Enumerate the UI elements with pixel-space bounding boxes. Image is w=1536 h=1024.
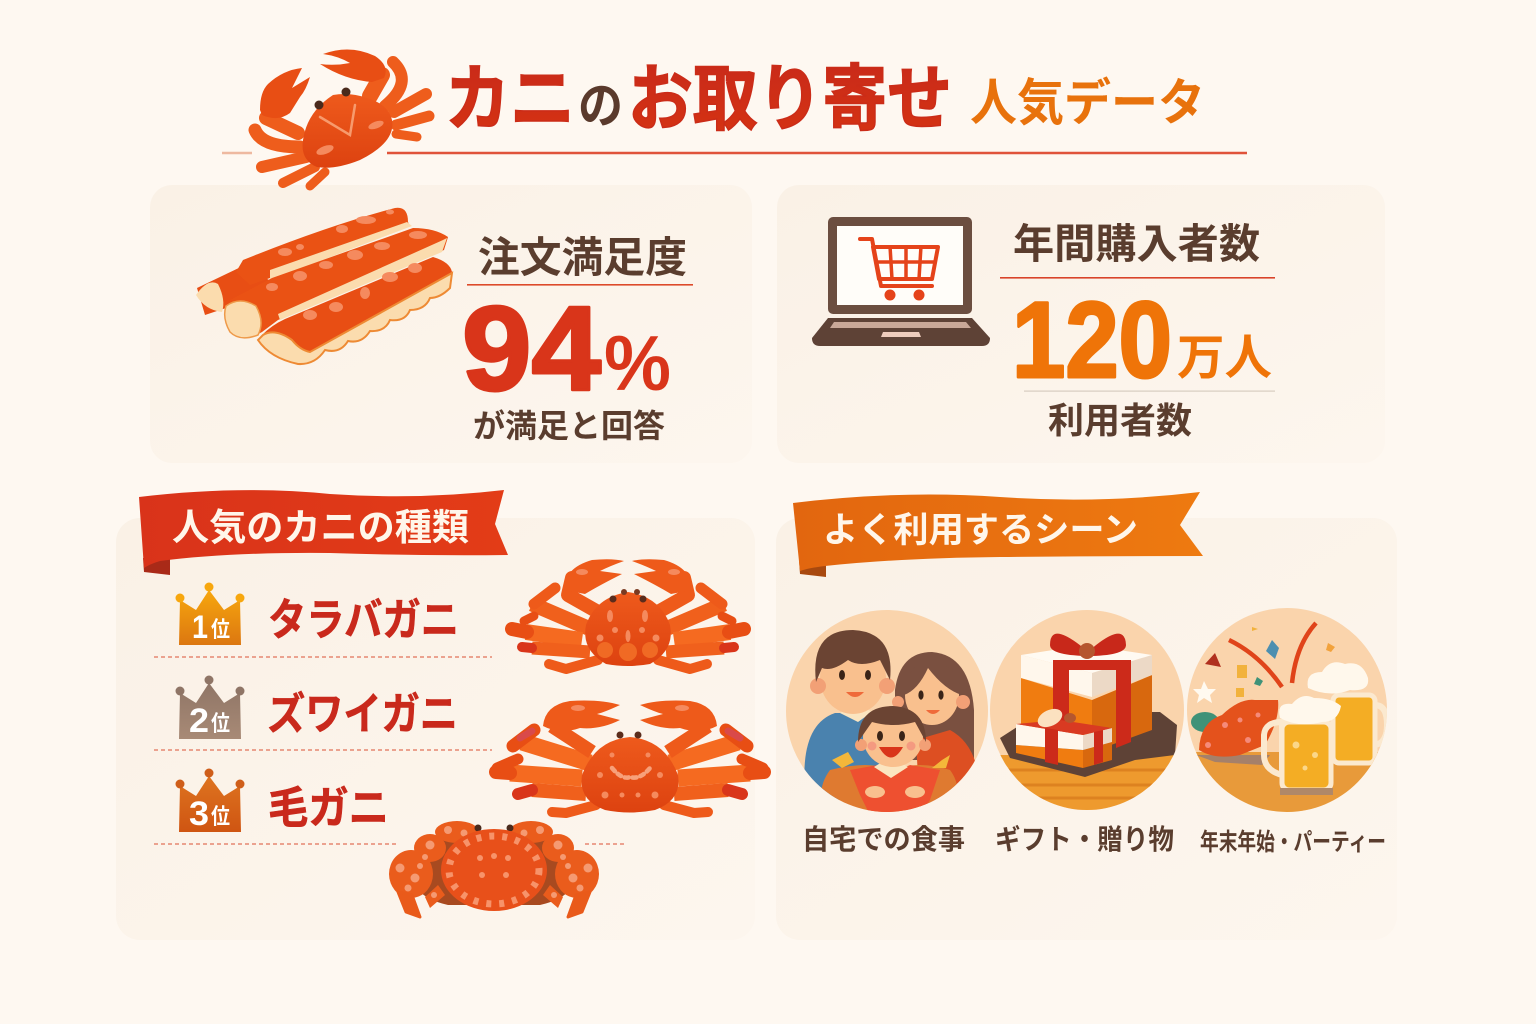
title: particle: の — [578, 78, 623, 134]
illustration: zuwaigani — [496, 700, 764, 813]
scene: party — [1180, 605, 1395, 856]
heading: 年間購入者数 — [1013, 221, 1260, 267]
rank 3 row — [176, 768, 389, 833]
stat: 94: 94 — [462, 282, 601, 416]
rank 2 row: 位 — [211, 711, 230, 736]
icon: header crab — [255, 49, 429, 186]
scene: family meal — [780, 605, 995, 855]
title: order: お取り寄せ — [628, 60, 952, 140]
heading rule — [467, 284, 693, 286]
rank 1 row: タラバガニ — [268, 596, 459, 645]
caption: が満足と回答 — [473, 408, 665, 444]
title: main: カニ — [445, 60, 575, 140]
panel: satisfaction — [150, 185, 752, 463]
banner: popular types: 人気のカニの種類 — [172, 507, 469, 548]
scene: gifts — [985, 605, 1190, 855]
panel: annual buyers — [777, 185, 1385, 463]
heading rule — [1000, 277, 1275, 279]
rank 1 row: 位 — [211, 617, 230, 642]
stat: unit: 万人 — [1177, 332, 1272, 385]
scene label: 年末年始・パーティー — [1200, 829, 1386, 856]
stat: 120: 120 — [1012, 279, 1172, 400]
illustration: crab legs — [196, 208, 452, 364]
rank 1 row — [176, 582, 459, 645]
heading: 注文満足度 — [478, 234, 687, 281]
title: subtitle: 人気データ — [970, 75, 1205, 131]
banner: popular types — [139, 490, 508, 575]
banner: usage scenes: よく利用するシーン — [823, 511, 1138, 550]
stat: percent: % — [604, 319, 671, 407]
illustration: tarabagani — [512, 559, 744, 669]
rank 2 row — [176, 676, 458, 740]
panel: usage scenes — [776, 492, 1387, 853]
panel: popular crab types — [116, 490, 764, 940]
rank 2 row: ズワイガニ — [267, 690, 458, 739]
icon: laptop with cart — [812, 217, 990, 346]
rank 2 row: 2 — [189, 702, 209, 740]
rank 3 row: 毛ガニ — [268, 784, 389, 833]
scene label: ギフト・贈り物 — [995, 824, 1174, 855]
illustration: kegani — [389, 821, 599, 917]
rank 3 row: 3 — [189, 795, 209, 833]
scene label: 自宅での食事 — [802, 824, 965, 855]
banner: usage scenes — [793, 492, 1203, 577]
rank 1 row: 1 — [192, 609, 208, 645]
title underline — [222, 152, 1247, 154]
caption: 利用者数 — [1048, 400, 1192, 441]
divider — [1024, 390, 1275, 392]
title block — [222, 60, 1247, 153]
rank 3 row: 位 — [211, 804, 230, 829]
